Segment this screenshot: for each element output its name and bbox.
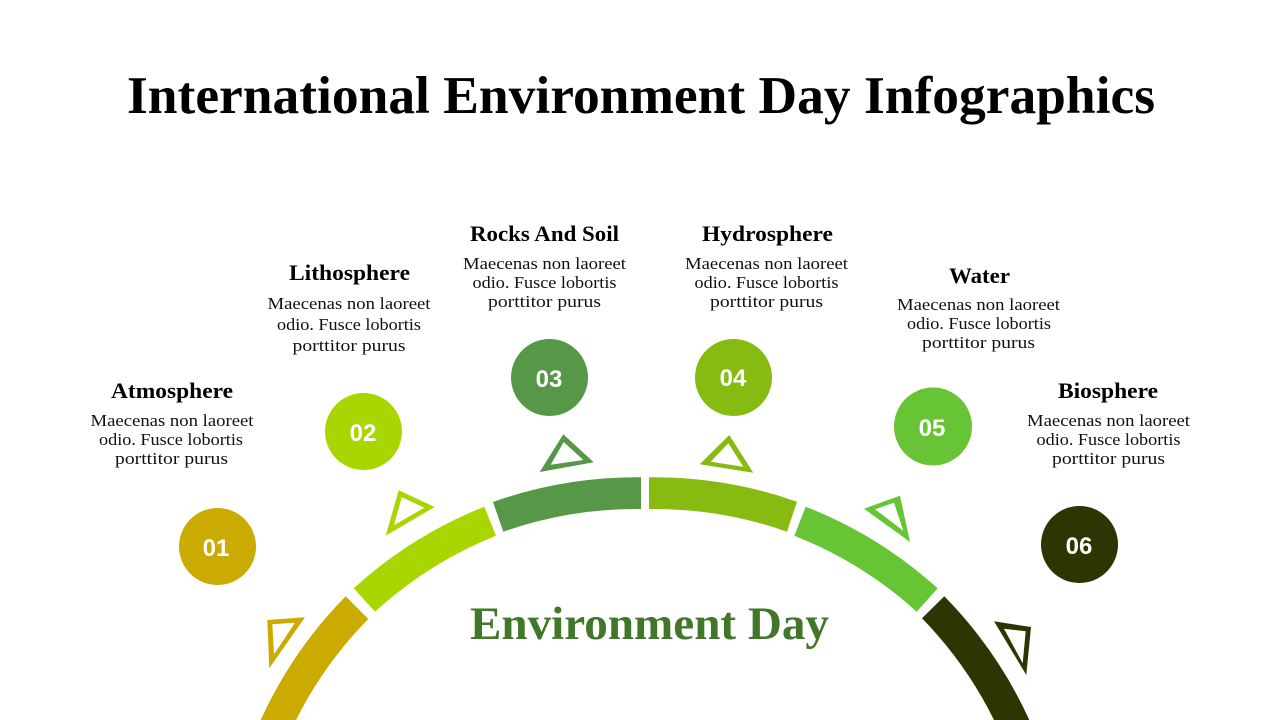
body text 04: odio. Fusce lobortis (694, 273, 838, 292)
body text 06: porttitor purus (1052, 449, 1165, 468)
heading: Lithosphere: Lithosphere (289, 260, 410, 285)
panel: step 04 Hydrosphere (649, 221, 848, 532)
body text 01 (90, 411, 254, 468)
body text 06 (1027, 411, 1190, 468)
badge 06: 06 (1066, 533, 1092, 560)
body text 05: odio. Fusce lobortis (907, 314, 1051, 333)
body text 06: Maecenas non laoreet (1027, 411, 1190, 430)
body text 05: porttitor purus (922, 333, 1035, 352)
title: International Environment Day Infographics (127, 67, 1155, 125)
arrow 05 (864, 496, 910, 542)
body text 03: porttitor purus (488, 292, 601, 311)
badge 02 (325, 393, 402, 470)
body text 04: Maecenas non laoreet (685, 254, 848, 273)
arc segment 06 (922, 596, 1029, 720)
arrow 02 (386, 490, 435, 536)
body text 05 (897, 295, 1060, 352)
badge 05 (894, 388, 972, 466)
arrow 01 (267, 617, 305, 668)
body text 05: Maecenas non laoreet (897, 295, 1060, 314)
badge 01: 01 (203, 535, 229, 562)
panel: step 03 Rocks And Soil (463, 221, 641, 532)
arc segment 04 (649, 477, 797, 532)
badge 01 (179, 508, 256, 585)
badge 02: 02 (350, 420, 376, 447)
panel: step 01 Atmosphere (90, 378, 368, 720)
panel: step 05 Water (794, 263, 1060, 612)
heading: Hydrosphere: Hydrosphere (702, 221, 833, 246)
panel: step 02 Lithosphere (268, 260, 496, 612)
body text 03: odio. Fusce lobortis (472, 273, 616, 292)
body text 02 (268, 294, 431, 355)
heading: Atmosphere: Atmosphere (111, 378, 233, 403)
body text 03 (463, 254, 626, 311)
body text 02: porttitor purus (292, 336, 406, 355)
arrow 06 (994, 621, 1031, 675)
center label: Environment Day: Environment Day (470, 598, 829, 650)
arrow 03 (540, 434, 594, 472)
badge 04: 04 (720, 365, 747, 392)
panel: step 06 Biosphere (922, 378, 1190, 720)
heading: Rocks And Soil: Rocks And Soil (470, 221, 619, 246)
body text 03: Maecenas non laoreet (463, 254, 626, 273)
badge 03 (511, 339, 588, 416)
body text 04 (685, 254, 848, 311)
badge 03: 03 (536, 366, 562, 393)
body text 01: Maecenas non laoreet (90, 411, 254, 430)
body text 06: odio. Fusce lobortis (1036, 430, 1180, 449)
badge 06 (1041, 506, 1118, 583)
body text 01: odio. Fusce lobortis (99, 430, 243, 449)
arc segment 03 (493, 477, 641, 532)
body text 02: Maecenas non laoreet (268, 294, 431, 313)
body text 02: odio. Fusce lobortis (277, 315, 421, 334)
arc segment 05 (794, 507, 938, 612)
heading: Biosphere: Biosphere (1058, 378, 1158, 403)
arc segment 01 (261, 596, 368, 720)
badge 05: 05 (919, 415, 945, 442)
body text 04: porttitor purus (710, 292, 823, 311)
badge 04 (695, 339, 772, 416)
arrow 04 (700, 435, 753, 473)
arc segment 02 (354, 507, 496, 612)
heading: Water: Water (949, 263, 1010, 288)
body text 01: porttitor purus (115, 449, 228, 468)
